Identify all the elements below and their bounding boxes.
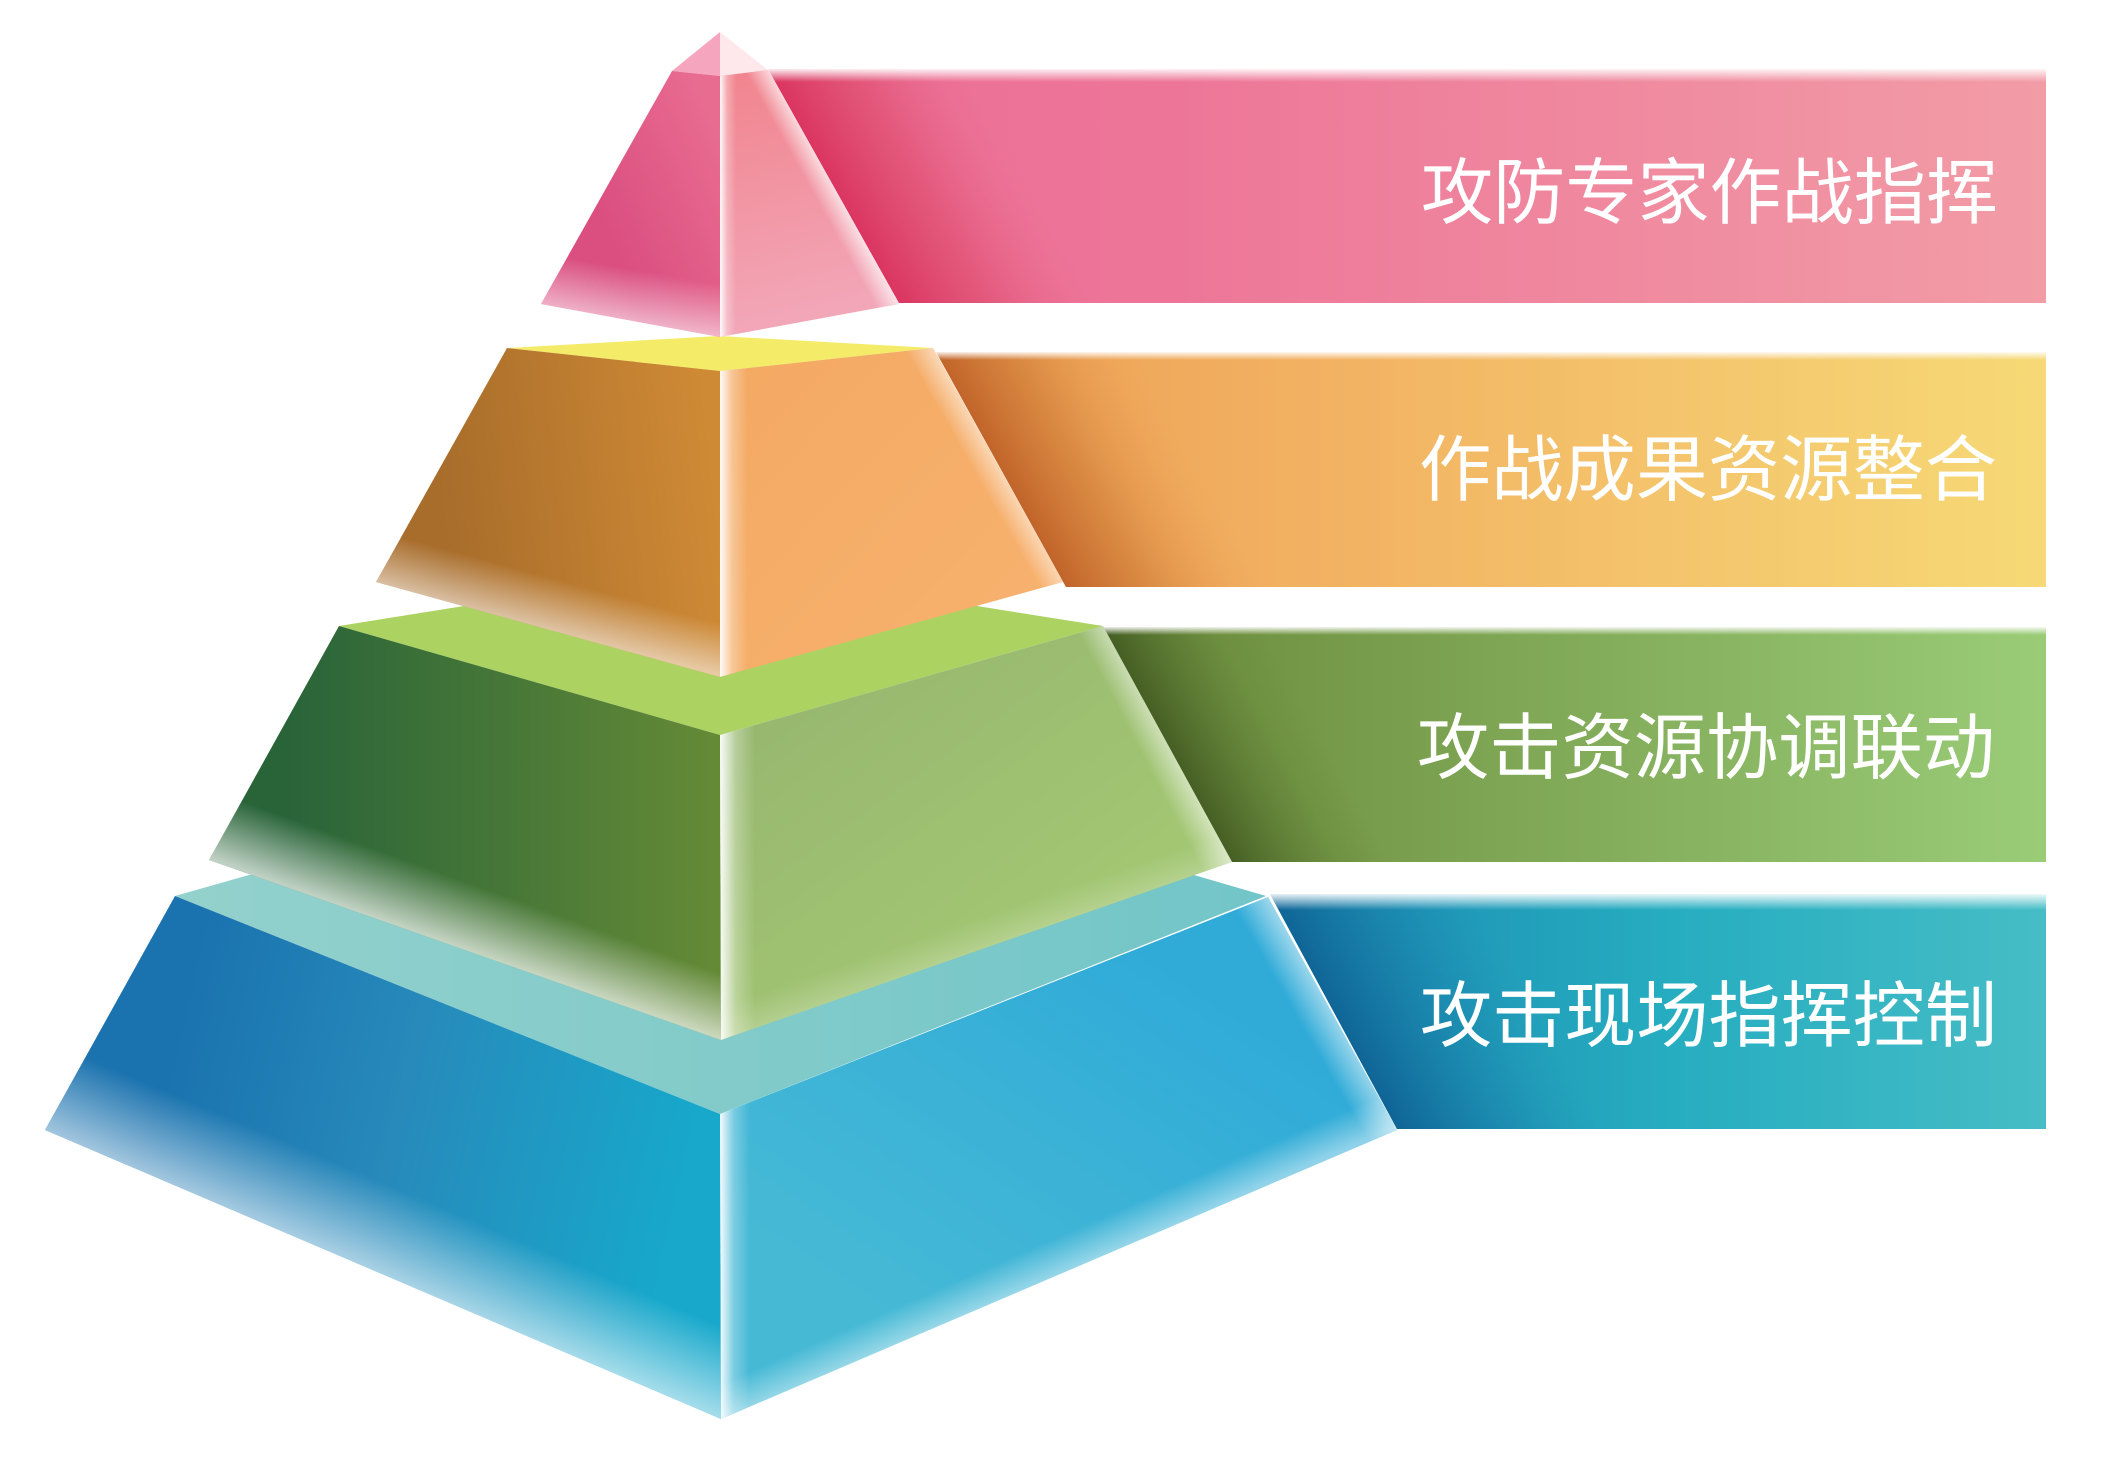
banner: 作战成果资源整合	[936, 352, 2046, 587]
slab right face: light blue	[720, 897, 1397, 1419]
banner: 作战成果资源整合: 作战成果资源整合	[1419, 431, 1997, 511]
tier 3: green layer	[209, 606, 2046, 1040]
banner: 攻防专家作战指挥: 攻防专家作战指挥	[1421, 154, 1998, 234]
tier 4: bottom blue layer	[45, 875, 2046, 1419]
slab right face: light green	[720, 626, 1232, 1040]
banner: 攻击现场指挥控制	[1270, 894, 2046, 1129]
banner: 攻击资源协调联动	[1103, 627, 2046, 862]
slab top: teal	[175, 875, 1266, 1114]
slab top: yellow	[507, 336, 933, 371]
tier 2: orange layer	[376, 336, 2046, 677]
slab left face: brown	[376, 348, 720, 677]
slab top: lime	[339, 606, 1103, 735]
apex cap	[672, 32, 768, 76]
banner: 攻击现场指挥控制: 攻击现场指挥控制	[1420, 977, 1997, 1057]
banner: 攻击资源协调联动: 攻击资源协调联动	[1417, 709, 1995, 789]
tier 1: pink apex	[541, 32, 2046, 337]
slab left face: blue	[45, 896, 721, 1419]
slab right face: light orange	[720, 348, 1063, 677]
banner: 攻防专家作战指挥	[768, 69, 2046, 303]
slab left face: green	[209, 626, 721, 1040]
apex right face	[720, 70, 899, 337]
apex left face	[541, 71, 720, 337]
